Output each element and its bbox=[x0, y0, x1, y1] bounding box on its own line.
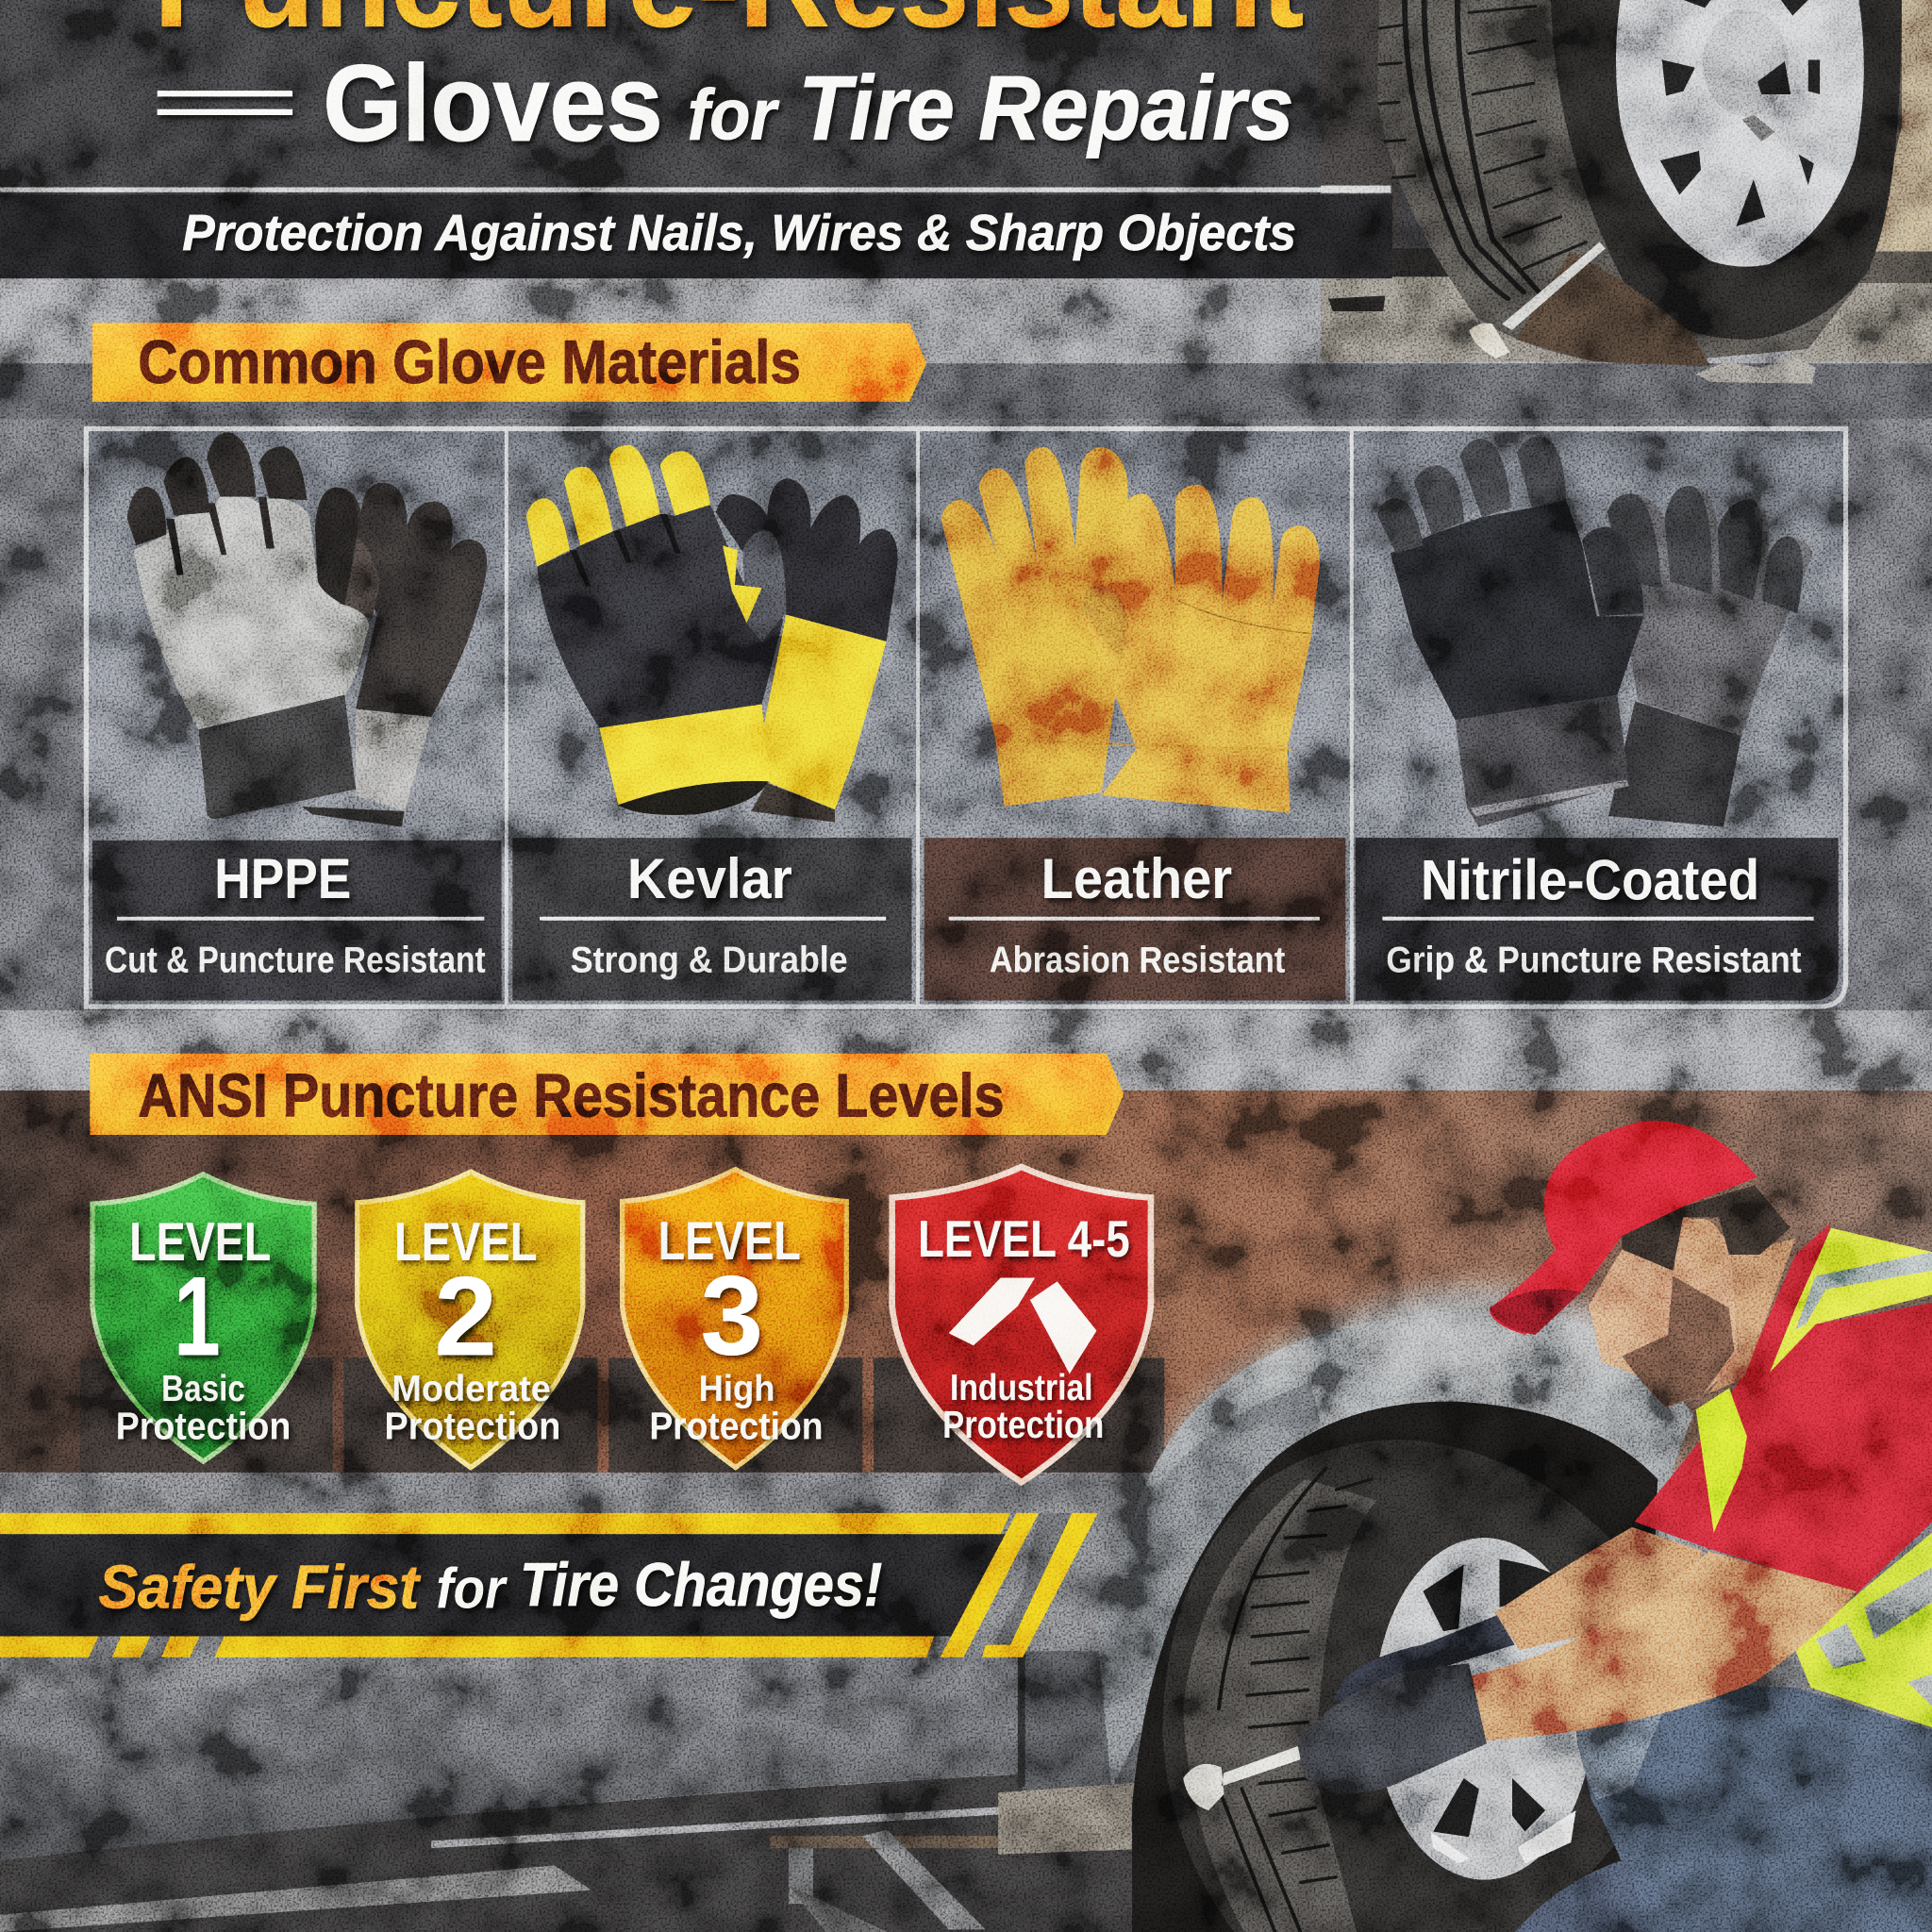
card: Kevlar bbox=[512, 445, 912, 1001]
shield: level 3: Protection bbox=[649, 1405, 823, 1448]
forearm lower bbox=[1466, 1551, 1857, 1740]
label: Leather: Leather bbox=[1041, 847, 1232, 910]
shield: level 1: LEVEL bbox=[129, 1212, 271, 1273]
forearm upper bbox=[1494, 1527, 1704, 1650]
title line 2: Tire Repairs bbox=[798, 58, 1293, 159]
shield: level 4-5: LEVEL 4-5 bbox=[918, 1209, 1130, 1268]
glove rear bbox=[1334, 1615, 1515, 1704]
photo: mechanic bbox=[1183, 1121, 1932, 1932]
face bbox=[1589, 1215, 1740, 1407]
desc: Nitrile-Coated: Grip & Puncture Resistant bbox=[1386, 941, 1802, 981]
shield: level 2 bbox=[358, 1172, 583, 1468]
jeans bbox=[1576, 1682, 1932, 1932]
shield: level 1 bbox=[92, 1174, 314, 1461]
title line 2: for bbox=[688, 75, 779, 156]
glove front bbox=[1295, 1663, 1487, 1794]
card: HPPE bbox=[92, 432, 502, 1001]
heading: ANSI levels: ANSI Puncture Resistance Levels bbox=[138, 1060, 1004, 1129]
jack bbox=[770, 1830, 998, 1932]
beard bbox=[1622, 1276, 1734, 1407]
ear bbox=[1683, 1219, 1726, 1281]
rocks bbox=[1695, 356, 1816, 384]
title line 2: Gloves bbox=[323, 43, 663, 164]
slogan: Safety First bbox=[98, 1552, 421, 1621]
title bbox=[154, 0, 1304, 164]
shield: level 2: Moderate bbox=[391, 1369, 551, 1409]
tire bbox=[1163, 1440, 1617, 1932]
shield: level 2: Protection bbox=[385, 1405, 560, 1448]
icon: HPPE gloves bbox=[127, 432, 487, 827]
safety banner bbox=[0, 1513, 1098, 1657]
nail bbox=[1502, 242, 1606, 330]
shield: level 3: 3 bbox=[700, 1252, 763, 1378]
label: Nitrile-Coated: Nitrile-Coated bbox=[1421, 848, 1759, 911]
backdrop bbox=[1867, 0, 1932, 252]
slogan: Tire Changes! bbox=[520, 1550, 882, 1619]
slogan: for bbox=[436, 1557, 508, 1620]
car body behind tire bbox=[1321, 0, 1399, 248]
fender haze bbox=[1171, 1291, 1688, 1602]
shield: level 4-5 bbox=[892, 1167, 1151, 1482]
shield: level 3 bbox=[623, 1170, 846, 1468]
sidewall bbox=[1551, 0, 1902, 340]
icon: Leather gloves bbox=[941, 447, 1320, 813]
icon: industrial glove symbol bbox=[949, 1277, 1096, 1374]
hair bbox=[1622, 1185, 1790, 1271]
shield: level 2: 2 bbox=[434, 1254, 497, 1380]
shield: level 3: High bbox=[699, 1369, 775, 1409]
desc: Leather: Abrasion Resistant bbox=[990, 941, 1285, 981]
desc: Kevlar: Strong & Durable bbox=[571, 941, 848, 981]
slogan bbox=[98, 1550, 882, 1621]
subtitle band: Protection Against Nails, Wires & Sharp Objects bbox=[182, 206, 1296, 261]
shield: level 1: 1 bbox=[174, 1254, 221, 1380]
fender bbox=[1132, 1312, 1693, 1682]
shield: level 4-5: Protection bbox=[942, 1403, 1104, 1446]
desc: HPPE: Cut & Puncture Resistant bbox=[105, 941, 486, 981]
title line 2 bbox=[158, 43, 1293, 164]
photo: car fender and wheel bbox=[770, 1291, 1693, 1932]
dark plates behind levels bbox=[80, 1357, 1164, 1473]
vest bbox=[1770, 1228, 1932, 1373]
neck bbox=[1708, 1239, 1795, 1393]
wheel arch bbox=[1132, 1402, 1657, 1932]
rim bbox=[1374, 1538, 1594, 1880]
label: HPPE: HPPE bbox=[214, 847, 351, 910]
stripes bbox=[0, 1513, 1098, 1657]
shield: level 1: Basic bbox=[161, 1369, 245, 1409]
shield: level 4-5: Industrial bbox=[950, 1368, 1093, 1408]
shield: level 2: LEVEL bbox=[394, 1212, 537, 1273]
shield: level 1: Protection bbox=[116, 1405, 291, 1448]
shirt bbox=[1635, 1223, 1932, 1594]
cap bbox=[1490, 1121, 1757, 1335]
subtitle band bbox=[0, 188, 1392, 278]
tread bbox=[1377, 0, 1902, 365]
rim bbox=[1616, 0, 1864, 267]
vest lower bbox=[1795, 1532, 1932, 1727]
card: Leather bbox=[924, 447, 1345, 1001]
panel: glove materials bbox=[86, 429, 1846, 1007]
gravel bbox=[1321, 276, 1932, 361]
icon: Nitrile gloves bbox=[1377, 437, 1812, 827]
photo: tire with nail on road bbox=[1321, 0, 1932, 384]
heading: common glove materials: Common Glove Materials bbox=[138, 327, 801, 396]
icon: Kevlar gloves bbox=[526, 445, 897, 823]
card: Nitrile-Coated bbox=[1356, 437, 1839, 1001]
label: Kevlar: Kevlar bbox=[627, 847, 792, 910]
wrench bbox=[1183, 1746, 1301, 1810]
shield: level 3: LEVEL bbox=[658, 1211, 801, 1272]
